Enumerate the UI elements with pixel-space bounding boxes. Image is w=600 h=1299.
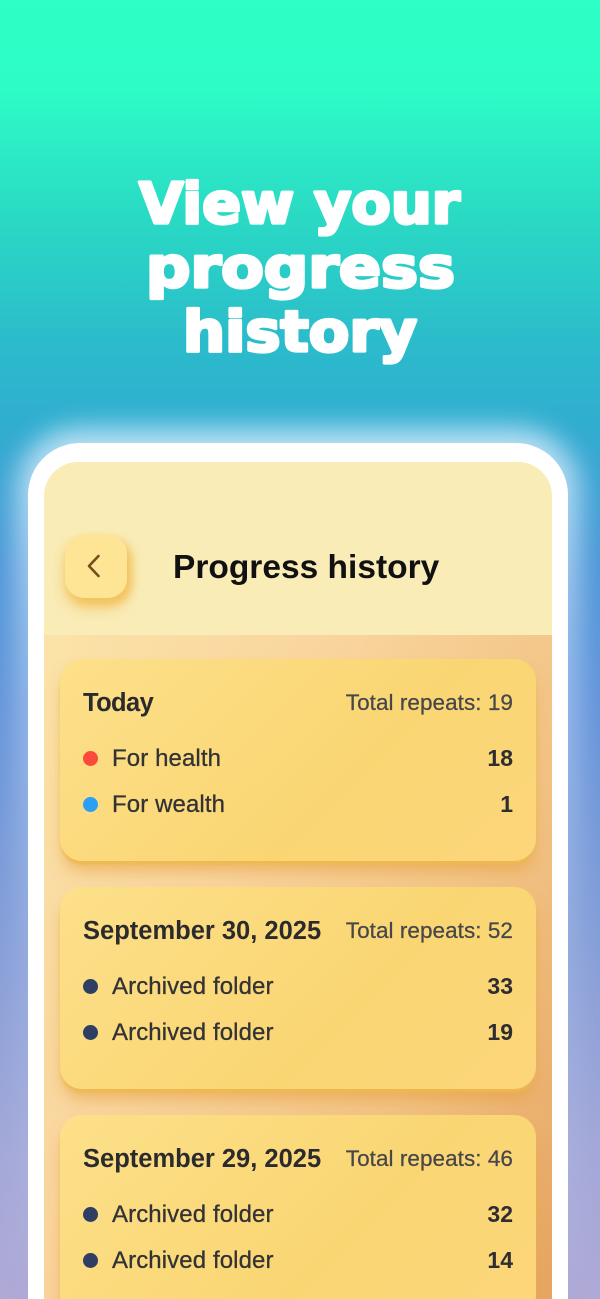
- row label: Archived folder: [112, 1019, 274, 1046]
- row value: 14: [487, 1247, 513, 1273]
- screen heading: Progress history: [173, 549, 439, 586]
- icon: back chevron: [88, 554, 100, 578]
- row value: 1: [500, 791, 513, 817]
- date: Today: [83, 689, 153, 717]
- row label: Archived folder: [112, 1247, 274, 1274]
- row label: Archived folder: [112, 1201, 274, 1228]
- legend dot: health: [83, 751, 98, 766]
- legend dot: [83, 979, 98, 994]
- title: progress: [146, 236, 455, 301]
- legend dot: wealth: [83, 797, 98, 812]
- total repeats: Total repeats: 52: [346, 918, 513, 943]
- row value: 19: [487, 1019, 513, 1045]
- card: September 29: [60, 1115, 536, 1299]
- legend dot: [83, 1025, 98, 1040]
- row label: For wealth: [112, 791, 225, 818]
- legend dot: [83, 1207, 98, 1222]
- back button: [65, 535, 127, 598]
- row value: 32: [487, 1201, 513, 1227]
- row label: Archived folder: [112, 973, 274, 1000]
- phone frame: [28, 443, 568, 1299]
- title: history: [183, 300, 417, 365]
- row value: 18: [487, 745, 513, 771]
- row value: 33: [487, 973, 513, 999]
- title: View your: [139, 172, 460, 237]
- title: [138, 172, 462, 365]
- date: September 29, 2025: [83, 1145, 321, 1173]
- history list: [44, 635, 552, 1299]
- total repeats: Total repeats: 19: [346, 690, 513, 715]
- card: today: [60, 659, 536, 861]
- total repeats: Total repeats: 46: [346, 1146, 513, 1171]
- row label: For health: [112, 745, 221, 772]
- app screen: [44, 462, 552, 1299]
- legend dot: [83, 1253, 98, 1268]
- date: September 30, 2025: [83, 917, 321, 945]
- card: September 30: [60, 887, 536, 1089]
